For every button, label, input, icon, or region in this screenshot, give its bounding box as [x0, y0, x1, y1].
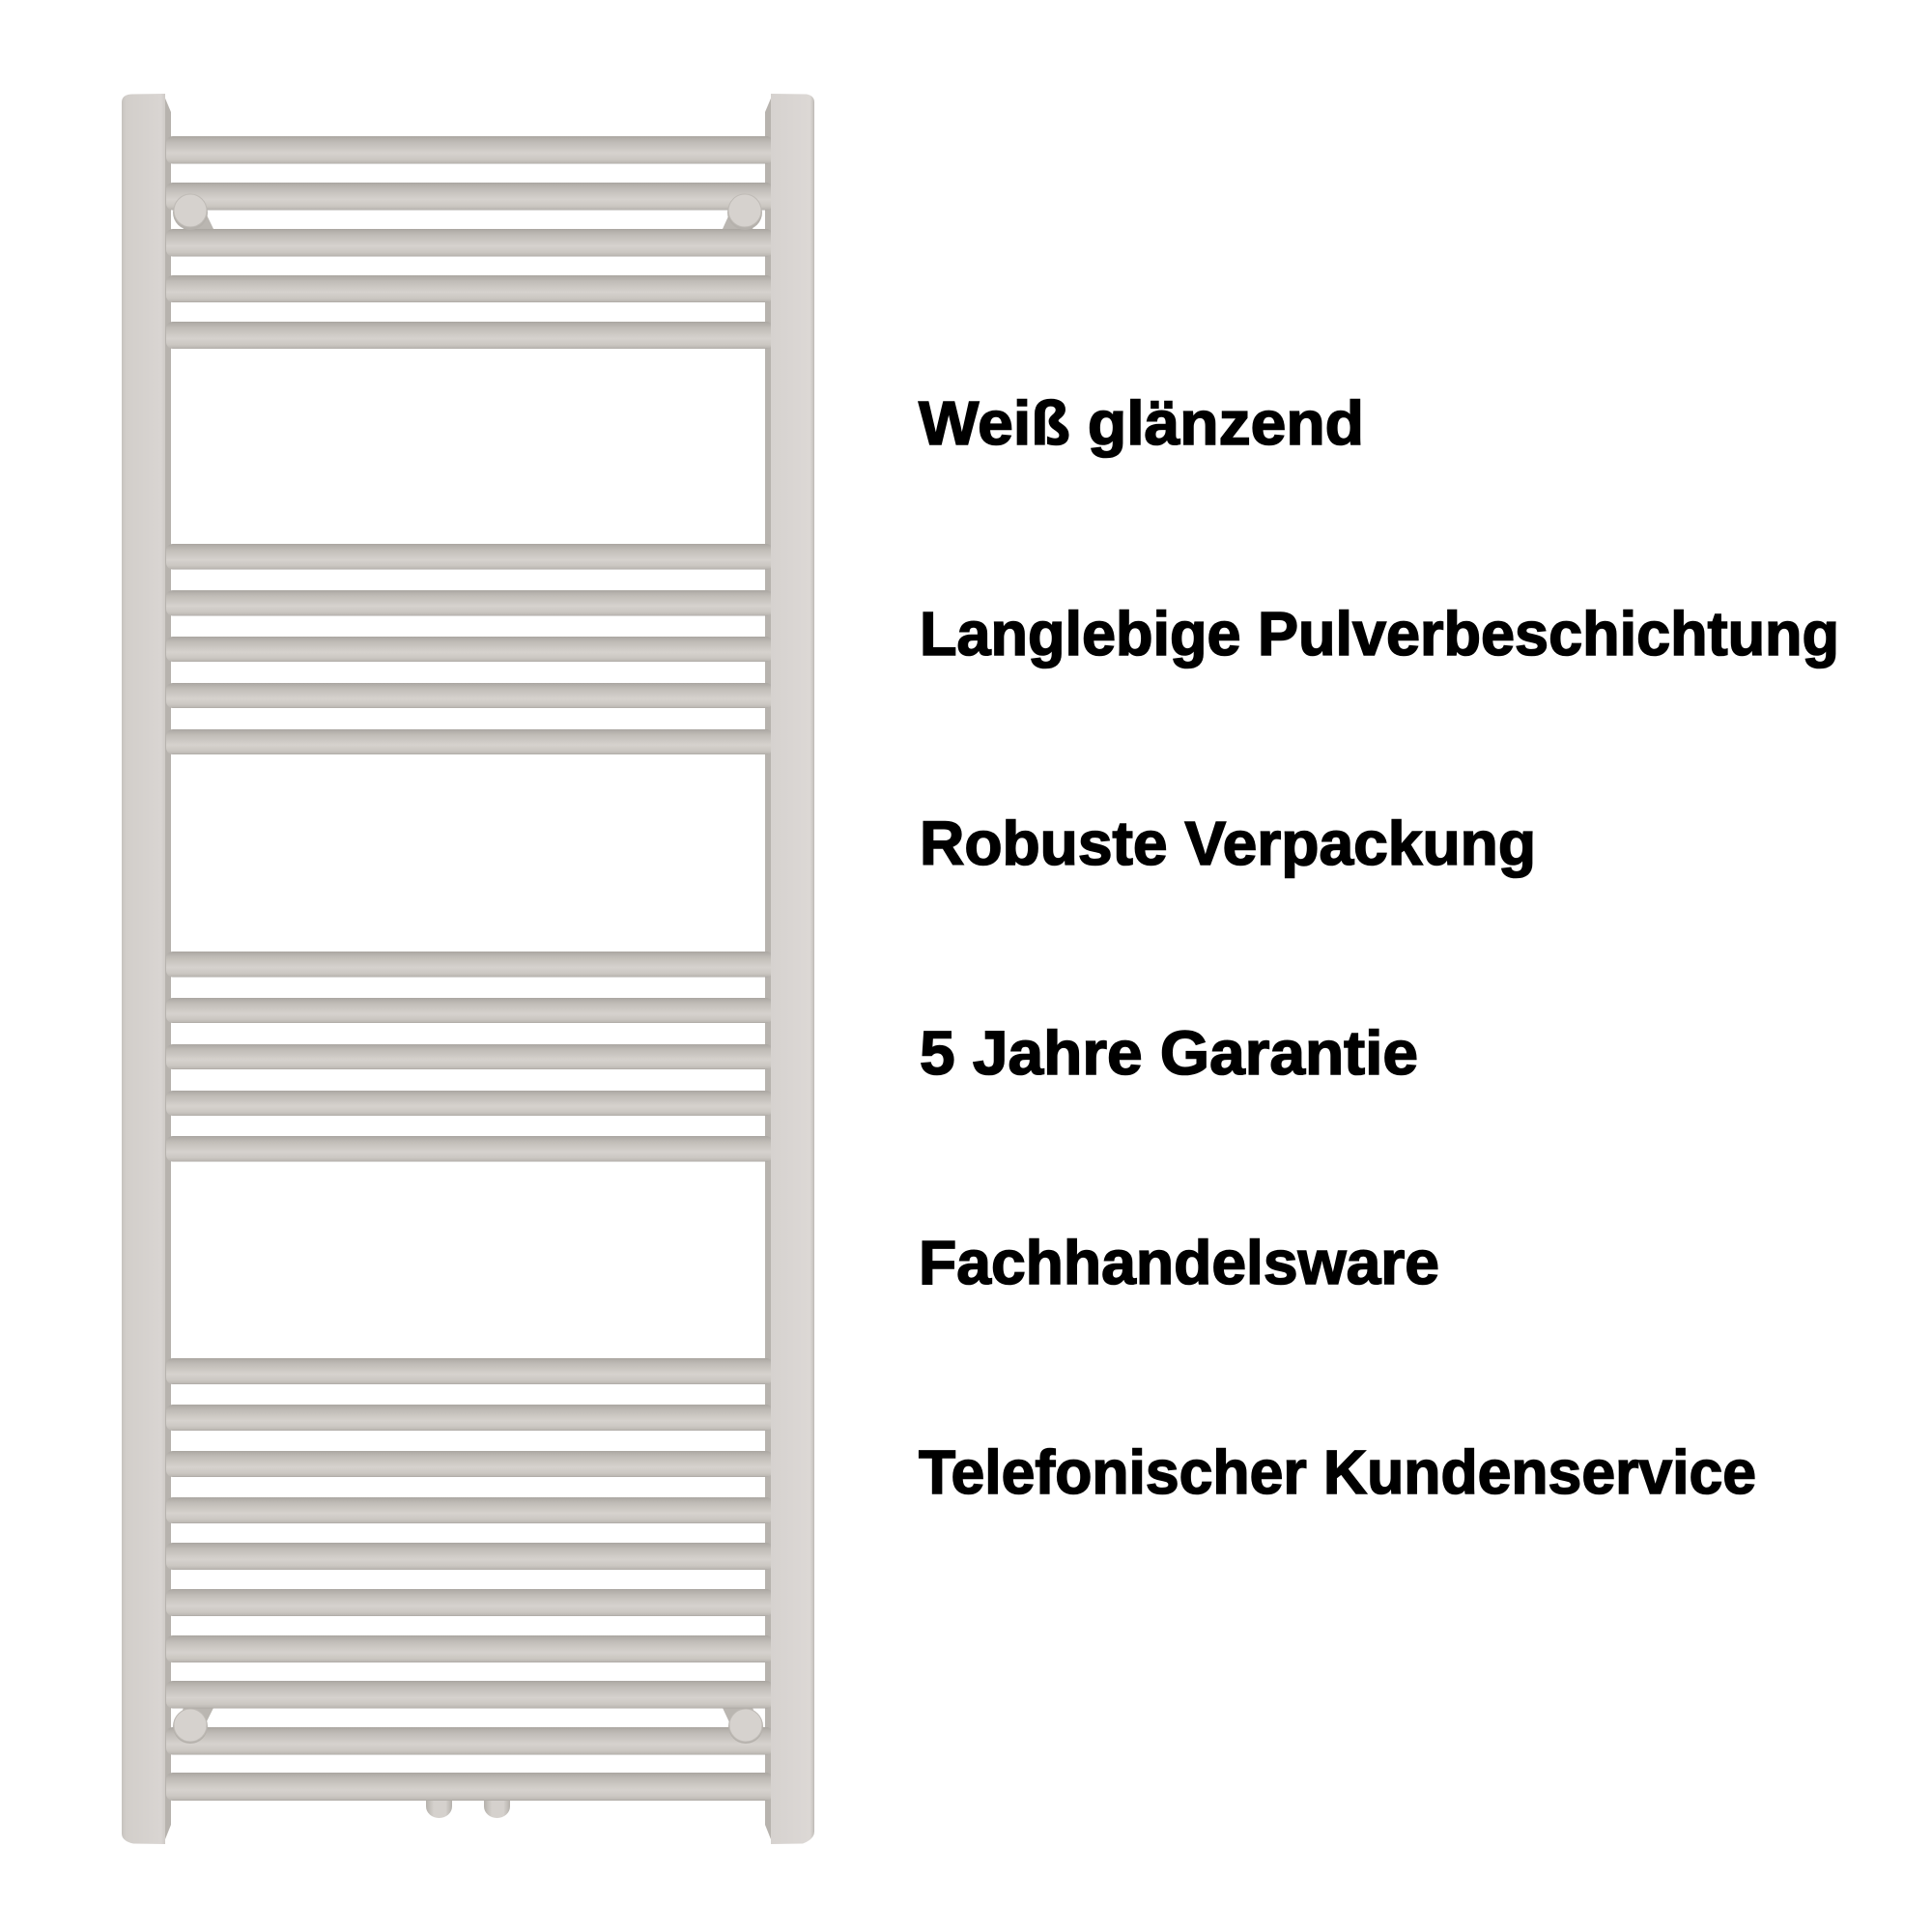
- towel bars: third group: [166, 952, 773, 1161]
- text: Fachhandelsware: Fachhandelsware: [919, 1228, 1439, 1297]
- towel bars: bottom group: [166, 1358, 773, 1801]
- wall brackets: [173, 194, 763, 1744]
- text: Langlebige Pulverbeschichtung: Langlebige Pulverbeschichtung: [920, 599, 1839, 668]
- text: Weiß glänzend: Weiß glänzend: [919, 388, 1364, 458]
- towel bars: top group: [166, 136, 773, 349]
- right rail: [771, 94, 814, 1844]
- towel bars: second group: [166, 544, 773, 754]
- left rail: [122, 94, 165, 1844]
- right rail side: [765, 94, 773, 1844]
- valve connectors: [426, 1797, 510, 1818]
- text: Robuste Verpackung: Robuste Verpackung: [920, 809, 1536, 878]
- panel: radiator: [122, 94, 814, 1844]
- text: Telefonischer Kundenservice: Telefonischer Kundenservice: [919, 1437, 1756, 1507]
- left rail side: [163, 94, 171, 1844]
- text: 5 Jahre Garantie: 5 Jahre Garantie: [920, 1018, 1418, 1088]
- bracket arms: [175, 197, 761, 1739]
